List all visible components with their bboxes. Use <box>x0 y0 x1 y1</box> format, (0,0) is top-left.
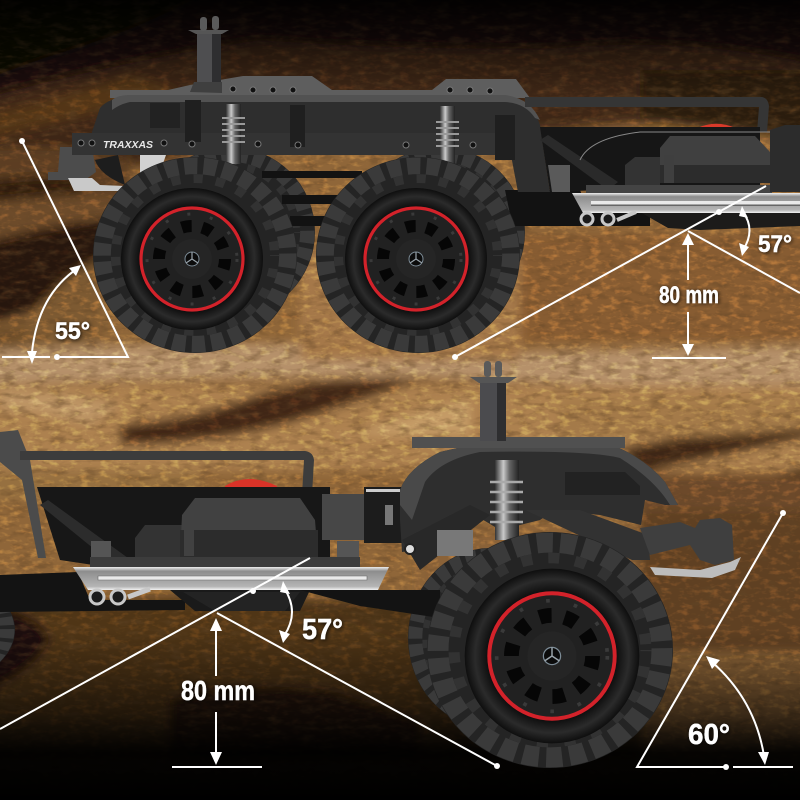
gearbox at right edge <box>770 125 800 192</box>
front tyres <box>93 157 520 353</box>
truck chassis: bottom view, front section <box>0 361 741 768</box>
breakover angle lines <box>452 186 800 360</box>
front rear-side wheel behind <box>408 548 572 728</box>
grey upper bed <box>110 76 530 98</box>
exhaust pipes <box>90 589 150 604</box>
main frame body <box>92 96 550 192</box>
rear bumper <box>48 147 166 191</box>
lower rail with logo <box>72 133 512 155</box>
shock <box>490 460 523 540</box>
approach angle 60 degrees <box>637 510 793 770</box>
annotation: top breakover and rear angle <box>2 138 800 364</box>
vertical ribs and bolts <box>78 86 515 160</box>
chassis rails <box>262 171 800 230</box>
silver step <box>572 193 800 213</box>
shocks <box>222 104 459 164</box>
red motor <box>225 479 277 490</box>
battery box <box>90 498 360 567</box>
silver step <box>73 567 389 590</box>
battery box <box>586 136 773 193</box>
rear bar <box>20 451 314 495</box>
rear departure angle 55 degrees: 55° <box>55 318 90 345</box>
rear departure angle 55 degrees <box>2 138 128 364</box>
annotation: bottom breakover and front angle <box>0 510 793 770</box>
motor can <box>322 487 402 543</box>
diagonal link <box>40 500 128 566</box>
ground clearance 80 mm: 80 mm <box>181 675 255 706</box>
red motor <box>693 124 738 134</box>
left pillar <box>0 430 46 558</box>
diagonal link <box>540 135 618 190</box>
ground clearance 80 mm <box>172 618 262 767</box>
top post <box>470 361 517 441</box>
brackets <box>91 541 359 566</box>
skid details <box>183 592 300 611</box>
dark frame section <box>540 127 760 192</box>
breakover angle 57 degrees <box>739 206 792 258</box>
breakover angle 57 degrees: 57° <box>758 231 792 258</box>
ground clearance 80 mm: 80 mm <box>659 282 719 309</box>
front fender and frame <box>400 437 678 570</box>
lower rails <box>0 572 440 618</box>
left edge wheel fragment <box>0 568 15 692</box>
rear bar <box>525 97 769 132</box>
ground clearance 80 mm <box>652 233 726 358</box>
truck chassis: top view, rear section <box>48 16 800 353</box>
top rail <box>112 95 540 120</box>
dark frame panel <box>37 487 330 566</box>
rear axle wheels behind <box>145 147 525 317</box>
approach angle 60 degrees: 60° <box>688 719 730 751</box>
exhaust pipes <box>581 212 636 225</box>
breakover angle 57 degrees: 57° <box>302 614 343 646</box>
breakover angle 57 degrees <box>279 581 343 646</box>
front bumper <box>640 518 741 578</box>
front tyre <box>427 532 673 768</box>
wire <box>580 132 770 160</box>
breakover angle lines <box>0 558 500 769</box>
top post <box>188 16 229 93</box>
logo text: TRAXXAS <box>103 140 153 151</box>
